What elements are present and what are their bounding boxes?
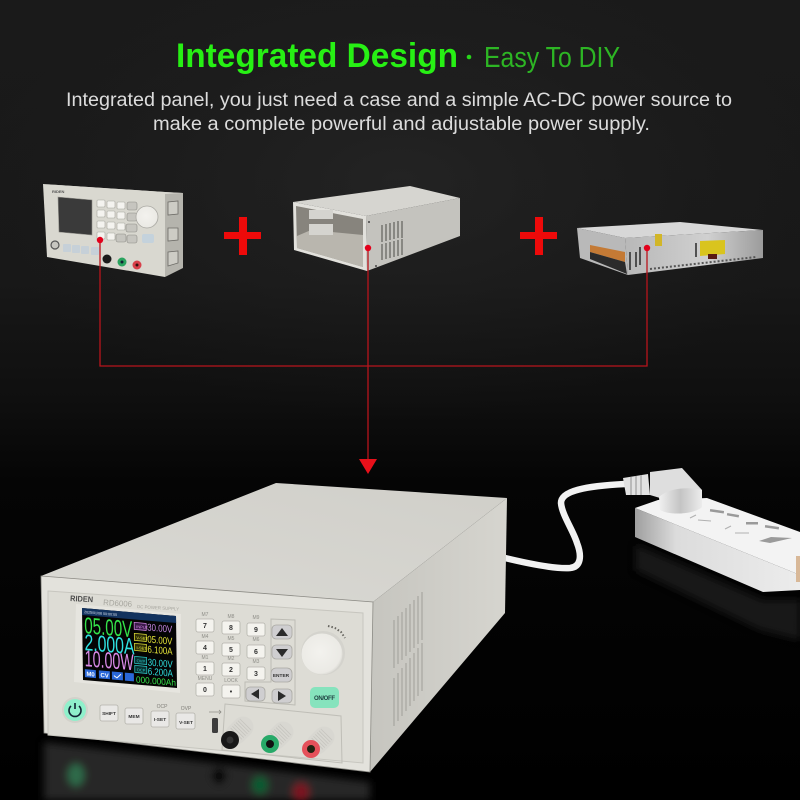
ON/OFF button (310, 687, 339, 708)
power plug (623, 468, 702, 514)
rotary knob (301, 626, 345, 675)
arrow down (359, 459, 377, 474)
LCD screen: V-SET (136, 635, 148, 641)
number keypad: 9 (254, 627, 258, 634)
USB port (209, 710, 221, 733)
connector dots (97, 237, 650, 251)
number keypad: M7 (202, 612, 209, 618)
brand labels (70, 594, 179, 612)
component: control panel module (43, 184, 183, 277)
function buttons: OCP (157, 704, 168, 710)
LCD screen (82, 608, 177, 688)
power cord (505, 484, 625, 568)
number keypad: 4 (203, 645, 207, 652)
connector lines (100, 240, 647, 460)
function buttons: V-SET (179, 720, 193, 726)
function buttons: I-SET (154, 717, 166, 723)
number keypad: M9 (253, 615, 260, 621)
number keypad: M4 (202, 634, 209, 640)
plus sign 2 (520, 217, 557, 255)
number keypad: 6 (254, 649, 258, 656)
number keypad: 0 (203, 687, 207, 694)
number keypad (196, 612, 265, 698)
component: AC-DC switching power source (577, 222, 763, 275)
number keypad: MENU (198, 676, 213, 682)
arrow keys (245, 619, 295, 705)
LCD screen: INPUT (136, 624, 149, 630)
brand labels: RIDEN (70, 594, 94, 604)
front panel (48, 591, 363, 763)
title: Integrated Design (176, 37, 458, 75)
subtitle text (66, 90, 732, 135)
power strip (635, 498, 800, 592)
title (176, 37, 620, 75)
LCD screen: 10.00W (85, 645, 134, 675)
function buttons (100, 704, 195, 729)
ON/OFF button: ON/OFF (314, 696, 335, 702)
plus sign 1 (224, 217, 261, 255)
screen bezel (74, 604, 181, 693)
LCD screen: 000.000Ah (136, 675, 176, 688)
LCD screen: I-SET (136, 645, 147, 651)
front bezel (41, 576, 373, 772)
LCD screen: 2025/01/08 00:00:00 (84, 610, 117, 617)
LCD screen: M0 (86, 672, 95, 679)
number keypad: 1 (203, 666, 207, 673)
LCD screen: 30.00V (147, 623, 173, 636)
number keypad: M6 (253, 637, 260, 643)
arrow keys: ENTER (273, 673, 290, 679)
number keypad: 3 (254, 671, 258, 678)
number keypad: M5 (228, 636, 235, 642)
number keypad: 8 (229, 625, 233, 632)
function buttons: OVP (181, 706, 192, 712)
LCD screen: 30.00V (148, 658, 173, 671)
main power supply unit (41, 483, 507, 772)
LCD screen: 6.100A (147, 645, 173, 658)
number keypad: • (230, 689, 233, 696)
number keypad: 5 (229, 647, 233, 654)
component: metal case (293, 186, 460, 271)
subtitle text: Integrated panel, you just need a case and a simple AC-DC power source to (66, 90, 732, 111)
brand labels: RD6006 (103, 598, 133, 609)
power button (62, 697, 88, 723)
number keypad: 7 (203, 623, 207, 630)
component: control panel module: RIDEN (52, 189, 65, 194)
LCD screen: OVP (137, 658, 145, 664)
case top (41, 483, 507, 602)
function buttons: SHIFT (102, 711, 116, 717)
case side (370, 498, 507, 772)
LCD screen: OCP (137, 667, 146, 673)
number keypad: M8 (228, 614, 235, 620)
reflections (44, 545, 800, 800)
function buttons: MEM (128, 714, 140, 720)
number keypad: M2 (228, 656, 235, 662)
title: Easy To DIY (484, 42, 620, 74)
LCD screen: CV (100, 673, 109, 680)
number keypad: M1 (202, 655, 209, 661)
number keypad: M3 (253, 659, 260, 665)
subtitle text: make a complete powerful and adjustable power supply. (153, 114, 650, 135)
LCD screen: 6.200A (148, 667, 173, 680)
number keypad: LOCK (224, 678, 238, 684)
brand labels: DC POWER SUPPLY (137, 604, 179, 612)
LCD screen: 05.00V (147, 635, 173, 648)
LCD screen: 2.000A (84, 629, 135, 659)
output terminals (221, 704, 342, 763)
LCD screen: 05.00V (84, 612, 133, 642)
number keypad: 2 (229, 667, 233, 674)
